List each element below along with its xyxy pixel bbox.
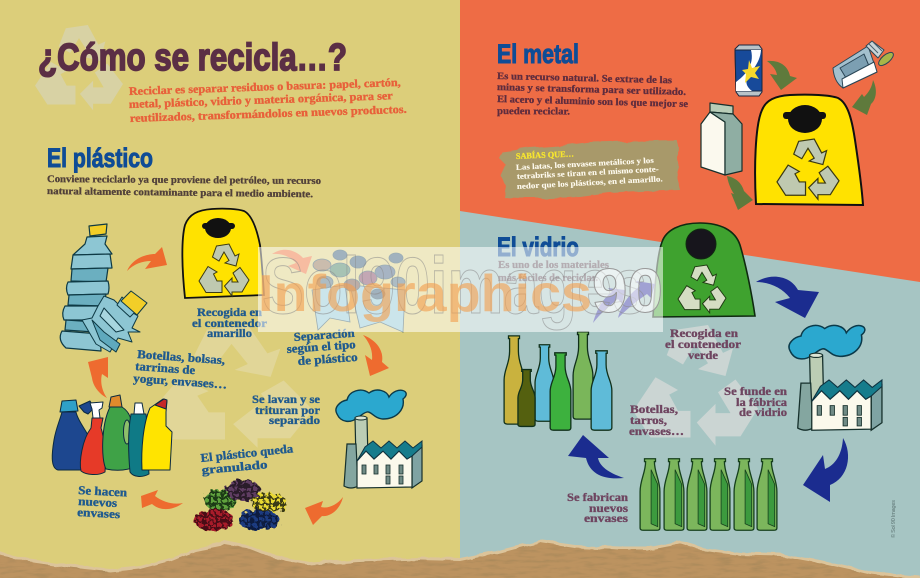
icon: sardine tin	[833, 41, 895, 88]
label: recogida verde	[665, 326, 742, 362]
icon: plastic granules	[194, 479, 287, 531]
arrow: separation to factory	[363, 335, 389, 376]
heading: el vidrio: El vidrio	[497, 232, 579, 262]
label: botellas tarros	[629, 402, 684, 438]
watermark: Infographics	[258, 265, 592, 323]
icon: factory glass cycle	[789, 325, 882, 430]
callout: sabías que: SABÍAS QUE…	[516, 148, 574, 161]
label: plástico granulado: granulado	[201, 457, 268, 477]
arrow: container to separated plastics	[272, 250, 312, 274]
label: botellas bolsas	[133, 347, 228, 392]
label: separación: según el tipo	[286, 337, 356, 356]
label: plástico granulado: El plástico queda	[200, 441, 294, 465]
intro text: reutilizados, transformándolos en nuevos productos.	[130, 104, 407, 125]
text: metal description	[497, 71, 689, 118]
arrow: factory to new bottles	[803, 438, 848, 502]
label: recogida verde: verde	[688, 348, 719, 362]
label: botellas tarros: Botellas,	[630, 402, 678, 416]
text: plastic description: natural altamente contaminante para el medio ambiente.	[47, 186, 314, 200]
icon: new plastic containers	[52, 395, 172, 476]
label: se funde: de vidrio	[739, 405, 787, 419]
callout: sabías que	[499, 140, 680, 198]
text: plastic description: Conviene reciclarlo ya que proviene del petróleo, un recurso	[47, 174, 321, 187]
label: se funde	[724, 384, 787, 419]
text: glass description: Es uno de los materiales	[498, 260, 609, 271]
label: se funde: la fábrica	[736, 395, 787, 409]
arrow: green container to factory	[756, 277, 819, 318]
label: se hacen nuevos envases: Se hacen	[78, 483, 128, 500]
label: separación: Separación	[293, 326, 355, 344]
icon: big plastic bottle	[60, 224, 112, 351]
text: metal description: El acero y el aluminio son los que mejor se	[497, 94, 689, 110]
arrow: carton to container	[727, 176, 753, 210]
text: glass description	[498, 260, 609, 284]
icon: pale recycling symbol glass cycle	[633, 325, 758, 446]
label: recogida verde: el contenedor	[665, 337, 742, 351]
background: orange band	[460, 0, 920, 282]
arrow: tin to container	[852, 80, 876, 115]
heading: el metal: El metal	[497, 39, 579, 69]
label: botellas bolsas: Botellas, bolsas,	[137, 347, 226, 367]
icon: row of new green bottles	[640, 459, 777, 530]
label: recogida amarillo: el contenedor	[192, 316, 268, 330]
intro text: metal, plástico, vidrio y materia orgánica, para ser	[129, 90, 393, 111]
watermark: Sol90images	[262, 241, 647, 330]
label: recogida amarillo: amarillo	[207, 326, 252, 340]
icon: green container	[653, 223, 755, 317]
label: botellas tarros: envases…	[629, 424, 684, 438]
label: plástico granulado	[200, 441, 294, 477]
label: se fabrican: envases	[584, 511, 628, 525]
label: se hacen nuevos envases	[77, 483, 128, 521]
label: se lavan: trituran por	[255, 403, 321, 417]
label: se lavan: Se lavan y se	[252, 392, 321, 406]
title: ¿Cómo se recicla…?	[38, 37, 347, 79]
arrow: new containers to bottle	[88, 357, 108, 398]
icon: pale recycling symbol plastic cycle	[150, 325, 313, 448]
arrow: new bottles to assorted bottles	[568, 435, 624, 478]
icon: factory plastic cycle	[336, 390, 422, 488]
label: botellas bolsas: yogur, envases…	[133, 371, 228, 392]
illustration: separated plastics pile	[312, 250, 405, 332]
icon: pale recycling symbol behind title	[35, 25, 123, 110]
label: botellas bolsas: tarrinas de	[135, 359, 196, 377]
intro text	[129, 77, 407, 125]
text: metal description: minas y se transforma para ser utilizado.	[497, 82, 687, 98]
callout: sabías que: Las latas, los envases metálicos y los	[516, 156, 654, 172]
icon: drink can	[735, 45, 762, 96]
label: se hacen nuevos envases: envases	[77, 505, 121, 521]
icon: milk carton	[701, 103, 742, 175]
label: se fabrican: Se fabrican	[567, 490, 628, 504]
heading: el plástico: El plástico	[47, 143, 153, 173]
label: se lavan: separado	[269, 413, 320, 427]
arrow: can to container	[767, 61, 797, 90]
arrow: bottle to container	[127, 247, 167, 271]
background: yellow page	[0, 0, 460, 578]
label: recogida verde: Recogida en	[670, 326, 738, 340]
text: copyright: © Sol 90 Images	[890, 500, 897, 538]
arrow: factory to granules	[305, 497, 343, 525]
text: plastic description	[47, 174, 321, 200]
label: separación: de plástico	[297, 350, 358, 368]
label: se funde: Se funde en	[724, 384, 787, 398]
icon: crushed plastic bottle	[82, 291, 147, 352]
torn earth strip	[0, 540, 920, 578]
icon: yellow container metal	[755, 95, 863, 205]
label: recogida amarillo: Recogida en	[197, 305, 262, 319]
watermark: 90	[592, 257, 663, 326]
text: glass description: más fáciles de reciclar.	[498, 273, 599, 284]
label: separación	[286, 326, 358, 368]
label: botellas tarros: tarros,	[630, 413, 667, 427]
label: se fabrican: nuevos	[589, 501, 628, 515]
text: metal description: Es un recurso natural. Se extrae de las	[497, 71, 672, 86]
icon: yellow container plastic	[182, 209, 264, 298]
intro text: Reciclar es separar residuos o basura: papel, cartón,	[129, 77, 401, 98]
background: blue-grey page	[460, 200, 920, 578]
label: se fabrican	[567, 490, 628, 525]
callout: sabías que: nedor que los plásticos, en el amarillo.	[517, 174, 663, 191]
label: recogida amarillo	[192, 305, 268, 340]
label: se hacen nuevos envases: nuevos	[78, 494, 118, 510]
text: metal description: pueden reciclar.	[497, 106, 571, 118]
icon: assorted glass bottles	[504, 332, 612, 430]
arrow: pale blue arrows under watermark	[593, 281, 655, 323]
arrow: granules to new containers	[141, 490, 183, 509]
label: se lavan	[252, 392, 321, 427]
callout: sabías que: tetrabriks se tiran en el mismo conte-	[517, 165, 659, 181]
